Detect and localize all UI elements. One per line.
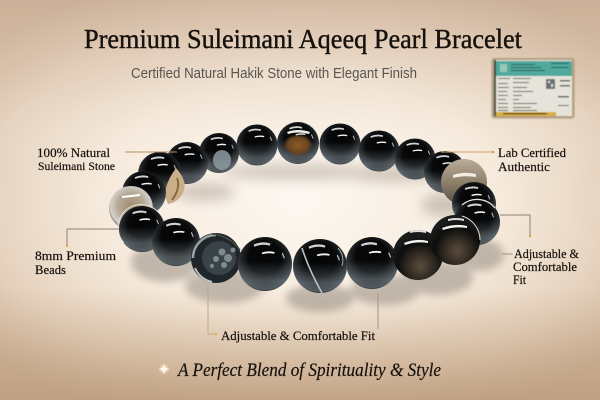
bracelet bbox=[109, 122, 500, 293]
callout line: 100% Natural bbox=[125, 151, 177, 153]
callout line: bottom center bbox=[377, 293, 379, 329]
light agate bead bbox=[109, 186, 153, 230]
gray-spot bead bbox=[199, 133, 239, 173]
callout text: Adjustable & Comfortable Fit (right): Comfortable bbox=[513, 260, 577, 274]
amber-marked bead bbox=[277, 122, 319, 164]
brown-tone bead bbox=[393, 230, 443, 280]
right stack beads bbox=[424, 151, 500, 265]
callout text: 8mm Premium Beads: Beads bbox=[35, 262, 66, 277]
callout line: lab certified bbox=[441, 151, 494, 153]
callout line: 8mm beads bbox=[66, 229, 119, 247]
callout text: 8mm Premium Beads: 8mm Premium bbox=[35, 248, 116, 263]
banded bead bbox=[293, 239, 347, 293]
QR code bbox=[546, 79, 555, 89]
callout text: Lab Certified Authentic: Authentic bbox=[498, 159, 550, 174]
bead shadows bbox=[175, 164, 469, 217]
callout text: Adjustable & Comfortable Fit (right): Fit bbox=[513, 273, 526, 287]
brown side band bbox=[165, 168, 185, 204]
certificate card bbox=[491, 58, 575, 119]
callout line: adjustable right elbow bbox=[500, 215, 531, 237]
title: Premium Suleimani Aqeeq Pearl Bracelet bbox=[84, 24, 522, 54]
callout text: 100% Natural Suleimani Stone: Suleimani Stone bbox=[38, 161, 115, 173]
sparkle icon bbox=[158, 363, 170, 375]
callout text: Adjustable & Comfortable Fit (right): Adjustable & bbox=[514, 247, 579, 261]
callout text: 100% Natural Suleimani Stone bbox=[37, 146, 115, 173]
tagline: A Perfect Blend of Spirituality & Style bbox=[176, 360, 441, 381]
bead behind brown band bbox=[166, 142, 208, 184]
callout text: Adjustable & Comfortable Fit (bottom): Adjustable & Comfortable Fit bbox=[221, 328, 375, 343]
callout text: Lab Certified Authentic: Lab Certified bbox=[498, 145, 566, 160]
druzy bead bbox=[191, 233, 241, 283]
callout line: adjustable right tick bbox=[502, 253, 513, 255]
callout line: bottom left elbow bbox=[208, 283, 217, 335]
callout text: 100% Natural Suleimani Stone: 100% Natural bbox=[37, 146, 111, 160]
subtitle: Certified Natural Hakik Stone with Elegant Finish bbox=[131, 65, 417, 82]
back beads bbox=[236, 124, 436, 180]
